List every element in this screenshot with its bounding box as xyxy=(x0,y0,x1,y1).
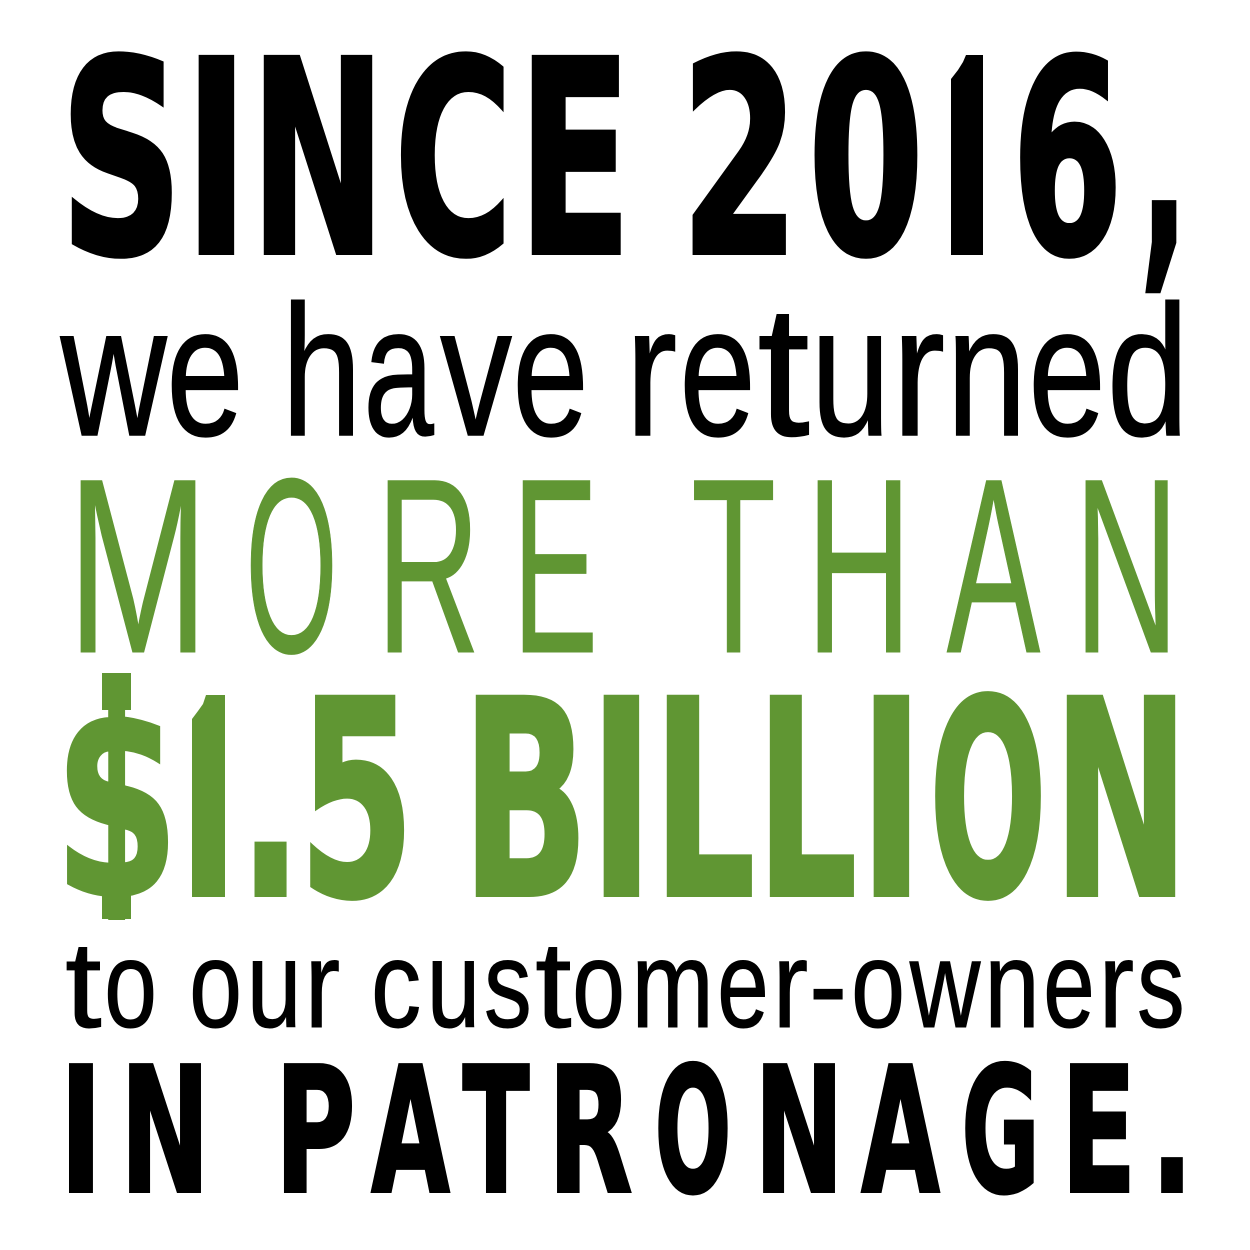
text line: we have returned: r xyxy=(892,268,945,475)
heading line: IN PATRONAGE.: A xyxy=(861,1030,940,1234)
heading line: SINCE 2016,: 0 xyxy=(808,4,924,317)
text line: we have returned: v xyxy=(440,268,512,475)
text line: to our customer-owners: o xyxy=(851,917,905,1054)
text line: we have returned: t xyxy=(757,268,810,475)
text line: to our customer-owners: s xyxy=(1137,917,1185,1054)
heading line: SINCE 2016,: 2 xyxy=(680,4,800,317)
text line: we have returned: n xyxy=(946,268,1027,475)
green heading: $1.5 BILLION: O xyxy=(929,644,1047,960)
text line: to our customer-owners: n xyxy=(984,917,1040,1054)
heading line: IN PATRONAGE.: . xyxy=(1151,1030,1193,1234)
text line: to our customer-owners: s xyxy=(484,917,532,1054)
text: , xyxy=(1140,4,1188,317)
green line: MORE THAN: R xyxy=(376,427,480,705)
text line: to our customer-owners: u xyxy=(247,917,302,1054)
text line: to our customer-owners: o xyxy=(189,917,242,1054)
heading line: SINCE 2016,: I xyxy=(184,4,249,317)
text line: to our customer-owners: r xyxy=(1099,917,1134,1054)
heading line: IN PATRONAGE.: P xyxy=(275,1030,356,1234)
text line: we have returned: h xyxy=(282,268,362,475)
text line: to our customer-owners: e xyxy=(1043,917,1095,1054)
green heading: $1.5 BILLION: B xyxy=(462,644,589,960)
text line: to our customer-owners: w xyxy=(909,917,981,1054)
heading line: SINCE 2016,: 6 xyxy=(1011,4,1123,317)
green heading: $1.5 BILLION: I xyxy=(859,644,924,960)
text line: to our customer-owners: u xyxy=(427,917,480,1054)
text line: we have returned: e xyxy=(1028,268,1106,475)
text line: to our customer-owners: m xyxy=(632,917,714,1054)
green line: MORE THAN: H xyxy=(806,427,912,705)
text line: we have returned: w xyxy=(60,268,167,475)
green heading: $1.5 BILLION: 5 xyxy=(299,644,414,960)
green line: MORE THAN: T xyxy=(691,427,776,705)
heading line: IN PATRONAGE.: T xyxy=(463,1030,530,1234)
text line: to our customer-owners: r xyxy=(773,917,808,1054)
green heading: $1.5 BILLION: L xyxy=(653,644,755,960)
text line: we have returned: r xyxy=(625,268,677,475)
green heading: $1.5 BILLION: . xyxy=(239,644,302,960)
heading line: IN PATRONAGE.: G xyxy=(961,1030,1040,1234)
heading line: IN PATRONAGE.: N xyxy=(120,1030,210,1234)
green heading: $1.5 BILLION: I xyxy=(589,644,654,960)
text line: we have returned: a xyxy=(364,268,434,475)
text line: to our customer-owners: o xyxy=(572,917,625,1054)
green line: MORE THAN: O xyxy=(245,427,338,705)
heading line: IN PATRONAGE.: E xyxy=(1061,1030,1136,1234)
text line: to our customer-owners: r xyxy=(305,917,340,1054)
green line: MORE THAN: A xyxy=(947,427,1040,705)
heading line: IN PATRONAGE.: R xyxy=(548,1030,632,1234)
heading line: IN PATRONAGE.: I xyxy=(59,1030,103,1234)
green heading: $1.5 BILLION: 1 xyxy=(172,644,242,960)
green line: MORE THAN: E xyxy=(512,427,598,705)
text line: we have returned: e xyxy=(680,268,756,475)
green heading: $1.5 BILLION: $ xyxy=(54,644,179,960)
heading line: IN PATRONAGE.: O xyxy=(655,1030,731,1234)
green line: MORE THAN: N xyxy=(1074,427,1179,705)
heading line: SINCE 2016,: E xyxy=(518,4,632,317)
text line: to our customer-owners: t xyxy=(65,917,102,1054)
text line: to our customer-owners: c xyxy=(371,917,421,1054)
text line: to our customer-owners: - xyxy=(809,917,847,1054)
text line: to our customer-owners: o xyxy=(104,917,157,1054)
heading line: IN PATRONAGE.: A xyxy=(371,1030,450,1234)
text line: we have returned: u xyxy=(811,268,890,475)
heading line: SINCE 2016,: C xyxy=(394,4,513,317)
text line: we have returned: d xyxy=(1107,268,1189,475)
green line: MORE THAN: M xyxy=(67,427,209,705)
heading line: SINCE 2016,: N xyxy=(250,4,386,317)
text line: we have returned: e xyxy=(512,268,589,475)
text line: to our customer-owners: e xyxy=(717,917,769,1054)
green heading: $1.5 BILLION: L xyxy=(756,644,857,960)
text line: to our customer-owners: t xyxy=(535,917,572,1054)
heading line: IN PATRONAGE.: N xyxy=(754,1030,844,1234)
text line: we have returned: e xyxy=(166,268,244,475)
heading line: SINCE 2016,: S xyxy=(60,4,183,317)
heading line: SINCE 2016,: 1 xyxy=(931,4,1001,317)
